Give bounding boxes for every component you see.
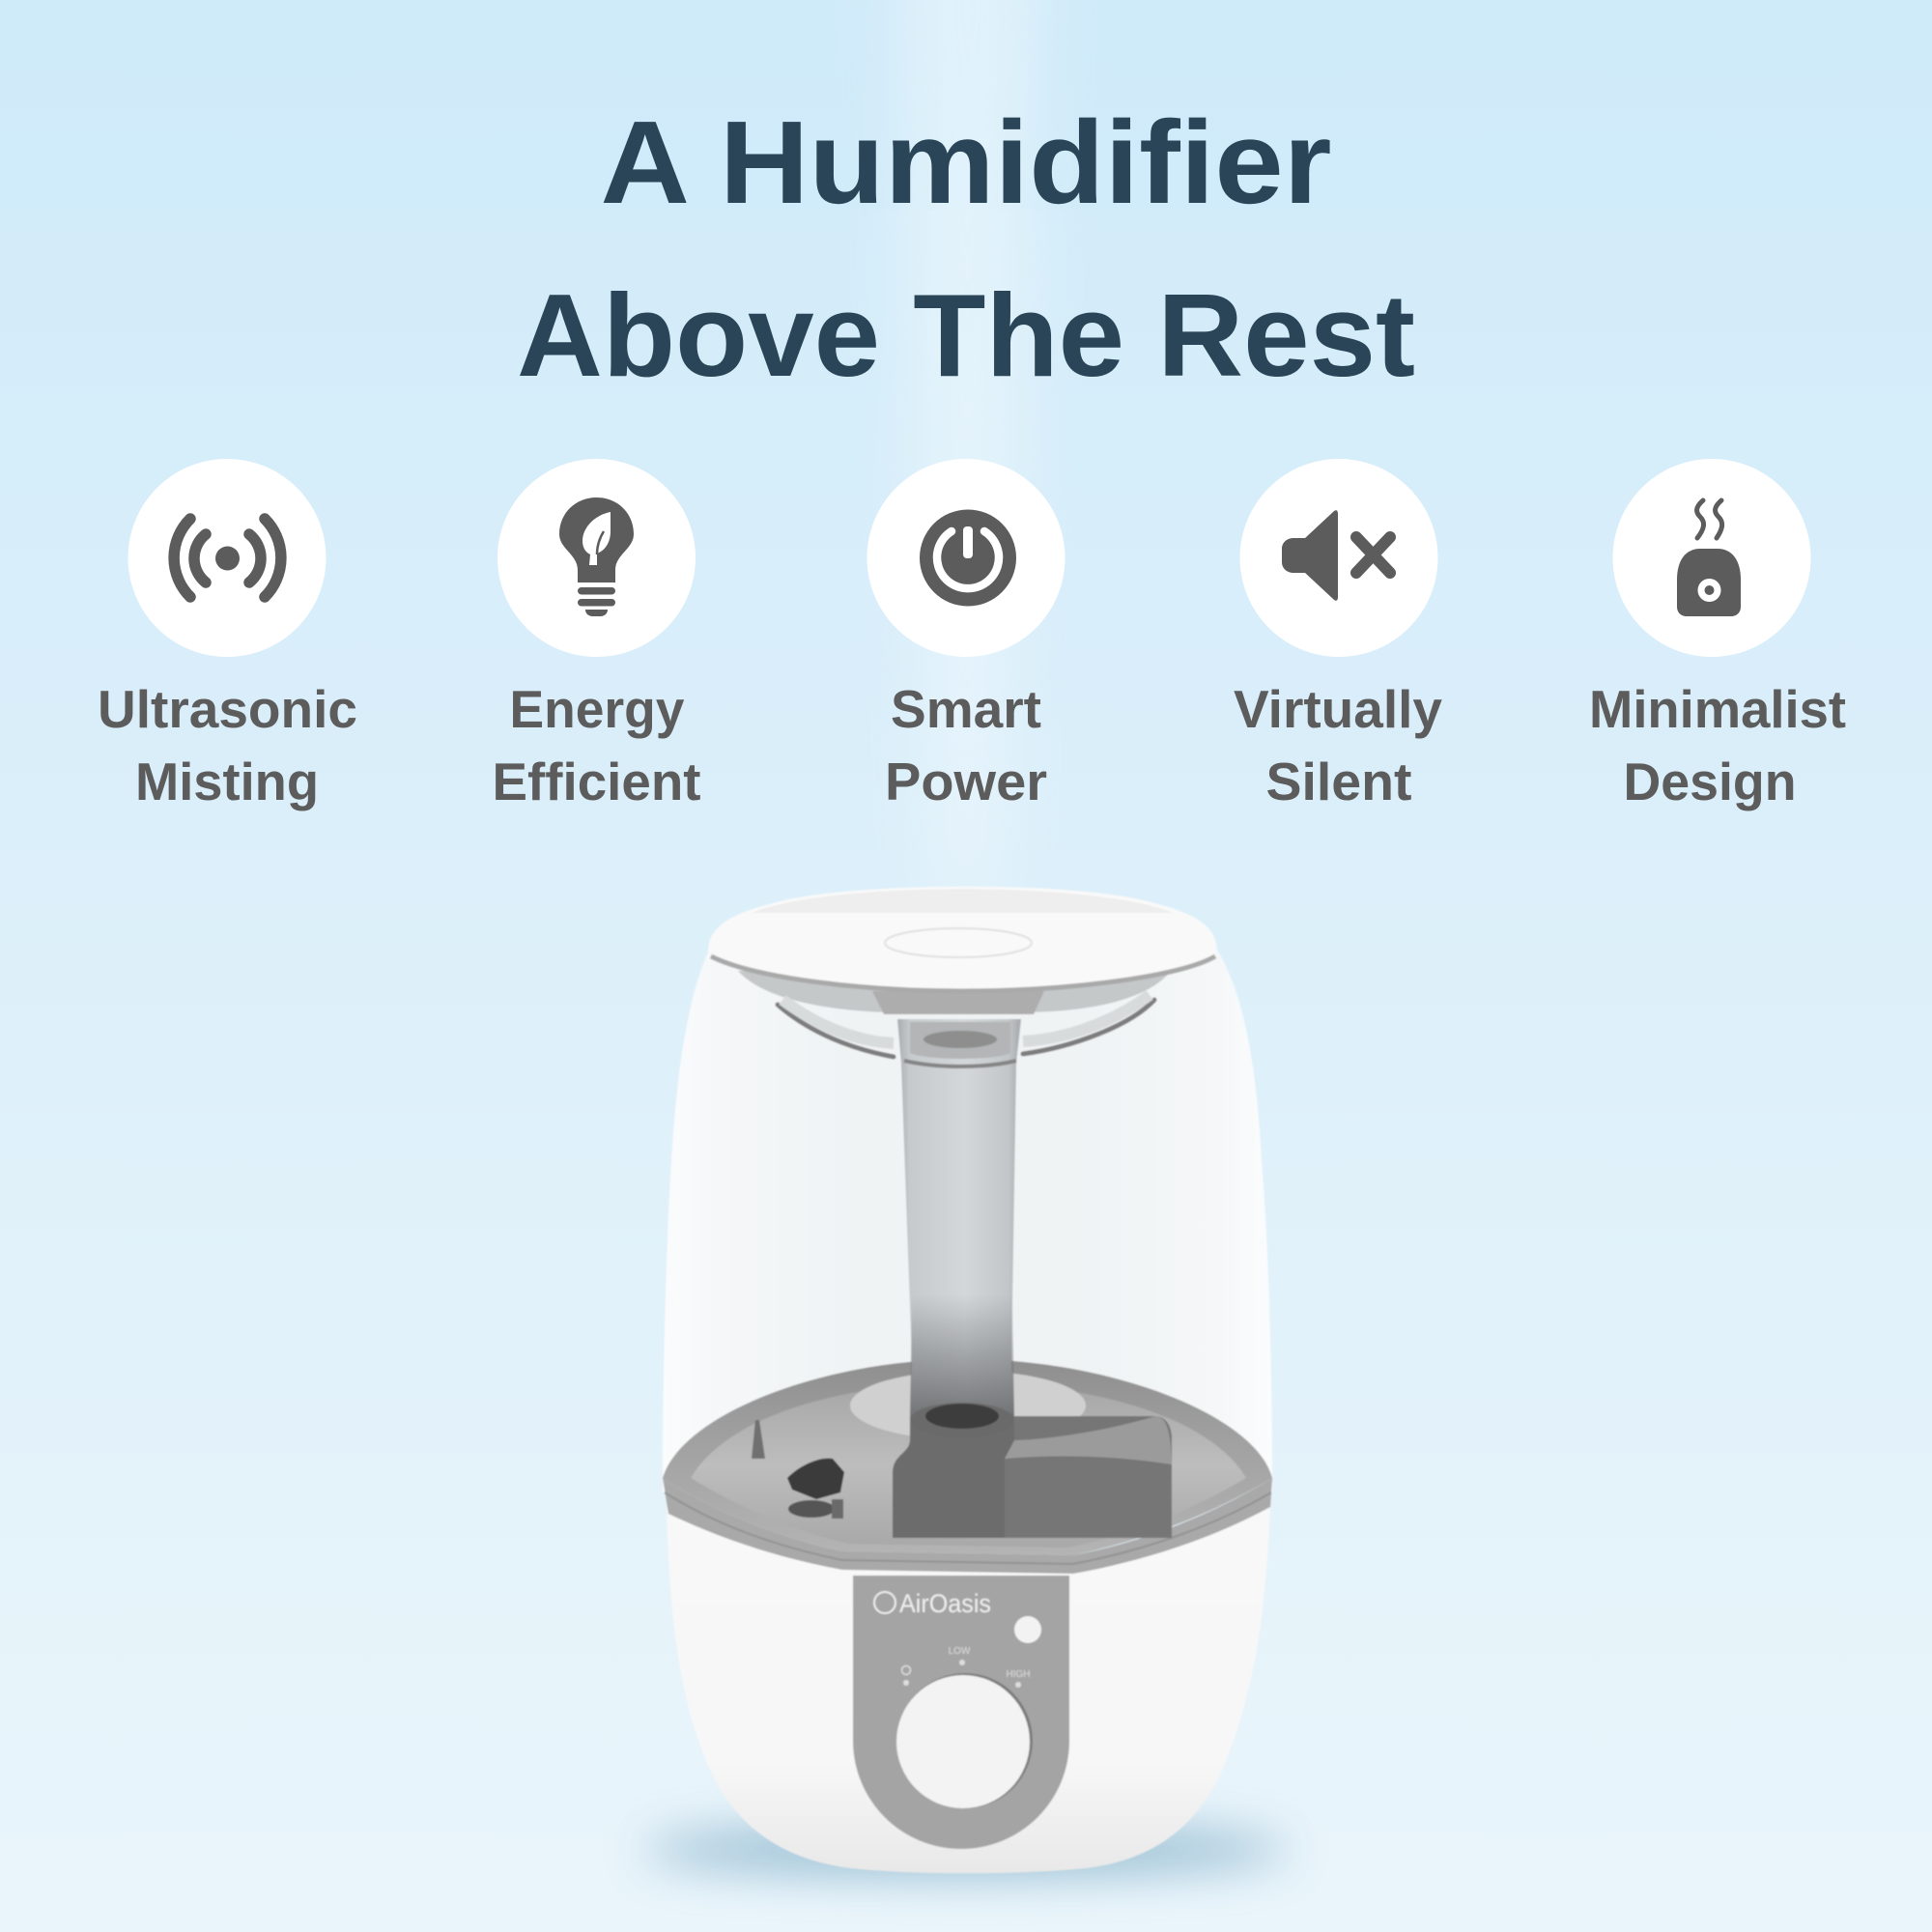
label bbox=[493, 679, 701, 811]
feature: virtually silent bbox=[1234, 459, 1442, 811]
dial labels: LOW bbox=[949, 1646, 971, 1657]
mist column bbox=[894, 0, 1043, 898]
light button bbox=[1014, 1616, 1041, 1643]
label: Minimalist bbox=[1589, 679, 1846, 739]
dial labels: HIGH bbox=[1007, 1669, 1030, 1680]
icon: muted speaker bbox=[1240, 459, 1437, 657]
feature: energy efficient bbox=[493, 459, 701, 811]
label: Smart bbox=[891, 679, 1041, 739]
label: Energy bbox=[510, 679, 685, 739]
label: Power bbox=[885, 752, 1047, 811]
label: Silent bbox=[1265, 752, 1412, 811]
floor shadow bbox=[642, 1825, 1290, 1875]
collar band bbox=[663, 1478, 1272, 1574]
lid underside bowl bbox=[738, 971, 1171, 1066]
feature: minimalist design bbox=[1589, 459, 1846, 811]
base body bbox=[667, 1502, 1270, 1873]
plate streak bbox=[752, 1420, 765, 1459]
icon: signal waves bbox=[128, 459, 327, 657]
title bbox=[517, 97, 1415, 401]
icon: humidifier with steam bbox=[1613, 459, 1810, 657]
title: A Humidifier bbox=[601, 97, 1331, 228]
dial labels bbox=[902, 1646, 1030, 1688]
feature: smart power bbox=[867, 459, 1065, 811]
icon: power button bbox=[867, 459, 1065, 657]
label: Ultrasonic bbox=[98, 679, 357, 739]
label bbox=[1589, 679, 1846, 811]
title: Above The Rest bbox=[517, 270, 1415, 401]
control panel bbox=[853, 1576, 1069, 1849]
collar inner line bbox=[665, 1492, 1271, 1564]
fan platform bbox=[850, 1371, 1086, 1440]
label: Misting bbox=[135, 752, 319, 811]
feature: ultrasonic misting bbox=[98, 459, 357, 811]
central tube bbox=[897, 1019, 1021, 1437]
brand logo: AirOasis bbox=[899, 1589, 991, 1618]
label: Efficient bbox=[493, 752, 701, 811]
label bbox=[1234, 679, 1442, 811]
label: Virtually bbox=[1234, 679, 1442, 739]
label bbox=[885, 679, 1047, 811]
label: Design bbox=[1623, 752, 1797, 811]
dark float bbox=[787, 1459, 844, 1519]
pump block bbox=[893, 1416, 1172, 1538]
plate inner floor bbox=[691, 1383, 1246, 1548]
lid bbox=[708, 887, 1217, 991]
dial bbox=[897, 1673, 1033, 1808]
water tank bbox=[663, 942, 1272, 1492]
icon: leaf bulb bbox=[497, 459, 696, 657]
water plate bbox=[663, 1359, 1272, 1555]
label bbox=[98, 679, 357, 811]
humidifier product bbox=[663, 887, 1272, 1873]
